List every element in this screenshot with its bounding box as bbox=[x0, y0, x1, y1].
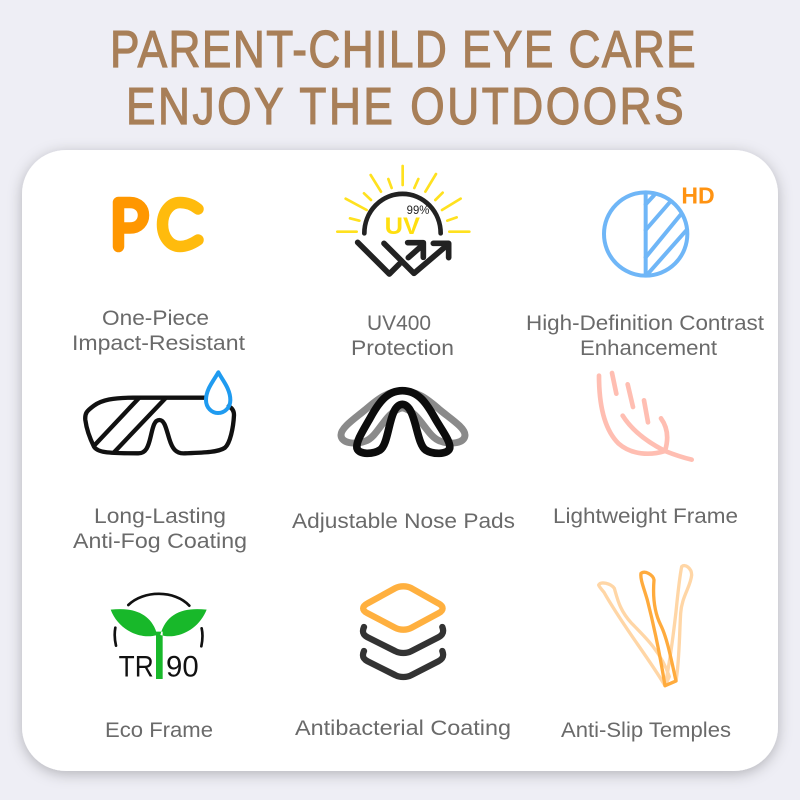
label: high-definition: Enhancement bbox=[580, 337, 717, 360]
label: UV400: UV400 bbox=[367, 312, 431, 335]
icon: TR90 sprout: 90 bbox=[166, 651, 199, 684]
icon: temples bbox=[599, 566, 692, 686]
label: UV400: Protection bbox=[351, 337, 454, 360]
icon: TR90 sprout: TR bbox=[119, 651, 154, 684]
label: UV400 bbox=[351, 312, 454, 360]
label: lightweight: Lightweight Frame bbox=[553, 505, 738, 528]
icon: UV sun: 99% bbox=[407, 203, 430, 217]
label: eco frame: Eco Frame bbox=[105, 719, 213, 742]
icon: UV sun: UV bbox=[385, 213, 420, 240]
icon: HD contrast bbox=[604, 182, 715, 276]
label: anti-slip: Anti-Slip Temples bbox=[561, 719, 731, 742]
icon: goggles with drop bbox=[85, 372, 234, 453]
label: anti-fog: Long-Lasting bbox=[94, 505, 226, 528]
label: antibacterial: Antibacterial Coating bbox=[295, 717, 511, 740]
label: one-piece: One-Piece bbox=[102, 307, 209, 330]
icon: PC bbox=[118, 202, 198, 246]
title: PARENT-CHILD EYE CARE bbox=[110, 21, 696, 79]
label: high-definition: High-Definition Contrast bbox=[526, 312, 764, 335]
title: ENJOY THE OUTDOORS bbox=[126, 78, 684, 136]
label: anti-fog: Anti-Fog Coating bbox=[73, 530, 247, 553]
label: anti-fog bbox=[73, 505, 247, 553]
panel: features card bbox=[22, 150, 778, 771]
icon: TR90 sprout bbox=[111, 594, 207, 684]
icon: feather bbox=[599, 373, 692, 460]
label: one-piece: Impact-Resistant bbox=[72, 332, 245, 355]
label: one-piece bbox=[72, 307, 245, 355]
icon: UV sun bbox=[337, 166, 469, 274]
label: high-definition bbox=[526, 312, 764, 360]
title bbox=[110, 21, 696, 136]
icon: nose pads bbox=[341, 391, 465, 453]
icon: layers bbox=[363, 586, 443, 677]
icon: HD contrast: HD bbox=[681, 182, 715, 208]
label: nose pads: Adjustable Nose Pads bbox=[292, 510, 515, 533]
